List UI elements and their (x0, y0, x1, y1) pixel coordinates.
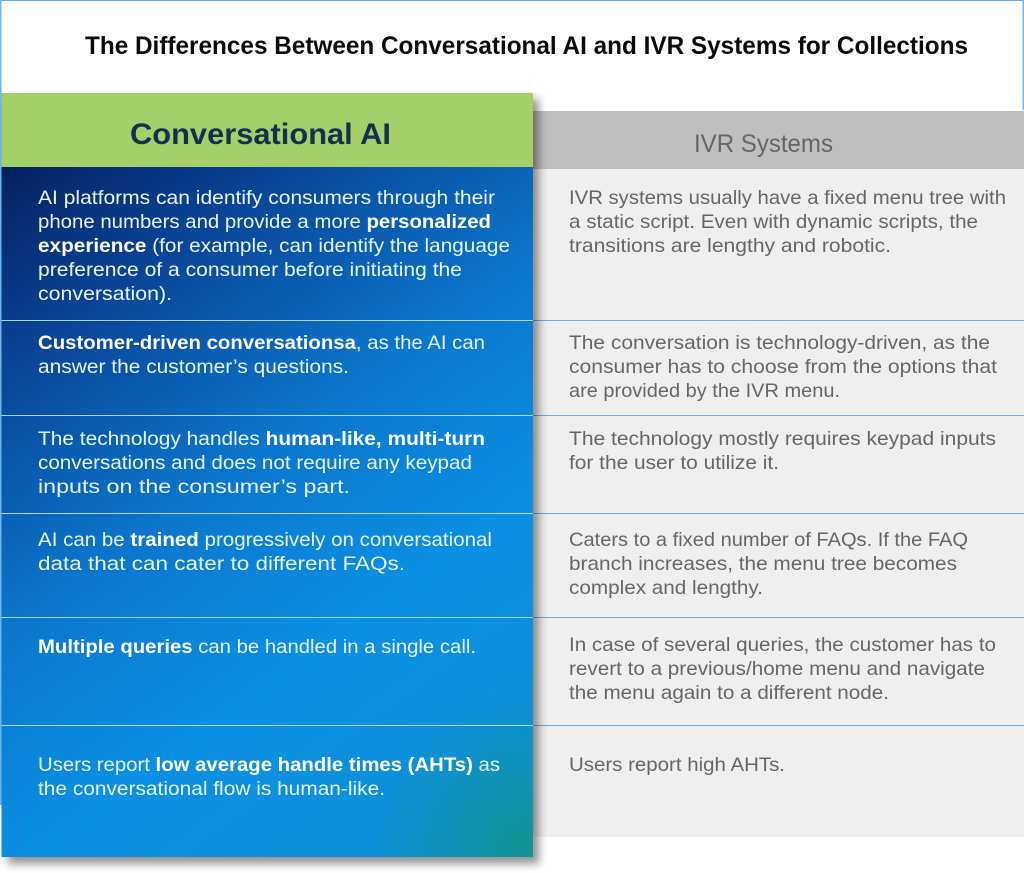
AI row 4 text (38, 529, 492, 575)
IVR row 4 text: Caters to a fixed number of FAQs. If the FAQ (569, 529, 968, 551)
IVR row 2 text: consumer has to choose from the options that (569, 356, 998, 378)
IVR row 5 text: In case of several queries, the customer has to (569, 634, 996, 656)
AI row 4 text: data that can cater to different FAQs. (38, 553, 405, 575)
IVR row 2 text (569, 332, 998, 402)
AI row 3 text (38, 428, 485, 498)
AI row 4 text: AI can be trained progressively on conversational (38, 529, 492, 551)
title: The Differences Between Conversational AI and IVR Systems for Collections (85, 32, 968, 60)
AI row 3 text: The technology handles human-like, multi-turn (38, 428, 485, 450)
AI row 2 text: Customer-driven conversationsa , as the AI can (38, 332, 485, 354)
panel: Conversational AI (2, 93, 533, 857)
IVR row 3 text: The technology mostly requires keypad inputs (569, 428, 996, 450)
AI row 1 text: conversation). (38, 283, 172, 305)
panel shadow (8, 99, 539, 864)
AI row 6 text: the conversational flow is human-like. (38, 778, 385, 800)
AI row 1 text (38, 187, 510, 305)
IVR row 3 text (569, 428, 996, 474)
IVR column background (533, 169, 1024, 837)
AI row 1 text: experience (for example, can identify the language (38, 235, 510, 257)
IVR row 4 text (569, 529, 968, 599)
IVR row 2 text: are provided by the IVR menu. (569, 380, 840, 402)
AI header (2, 93, 533, 167)
AI row 3 text: conversations and does not require any keypad (38, 452, 472, 474)
IVR row 4 text: branch increases, the menu tree becomes (569, 553, 957, 575)
IVR row 6 text: Users report high AHTs. (569, 754, 785, 776)
IVR row 1 text: a static script. Even with dynamic scripts, the (569, 211, 978, 233)
AI row 6 text (38, 754, 500, 800)
IVR row 3 text: for the user to utilize it. (569, 452, 779, 474)
IVR header (533, 111, 1024, 169)
AI row 1 text: preference of a consumer before initiating the (38, 259, 462, 281)
AI column background (2, 167, 533, 857)
IVR row 1 text: transitions are lengthy and robotic. (569, 235, 891, 257)
IVR row 5 text (569, 634, 996, 704)
IVR row 1 text: IVR systems usually have a fixed menu tree with (569, 187, 1006, 209)
AI row 1 text: phone numbers and provide a more personalized (38, 211, 491, 233)
AI row 2 text: answer the customer’s questions. (38, 356, 349, 378)
IVR row 4 text: complex and lengthy. (569, 577, 763, 599)
AI row 3 text: inputs on the consumer’s part. (38, 476, 350, 498)
IVR row dividers (533, 320, 1024, 726)
AI row dividers (2, 320, 533, 726)
panel: IVR systems (533, 111, 1024, 837)
IVR row 2 text: The conversation is technology-driven, as the (569, 332, 990, 354)
AI header: Conversational AI (130, 118, 391, 151)
IVR row 1 text (569, 187, 1006, 257)
IVR row 5 text: the menu again to a different node. (569, 682, 889, 704)
AI row 1 text: AI platforms can identify consumers through their (38, 187, 496, 209)
IVR row 5 text: revert to a previous/home menu and navigate (569, 658, 985, 680)
AI row 6 text: Users report low average handle times (AHTs) as (38, 754, 500, 776)
IVR header: IVR Systems (694, 130, 833, 158)
AI row 2 text (38, 332, 485, 378)
AI row 5 text: Multiple queries can be handled in a single call. (38, 636, 476, 658)
